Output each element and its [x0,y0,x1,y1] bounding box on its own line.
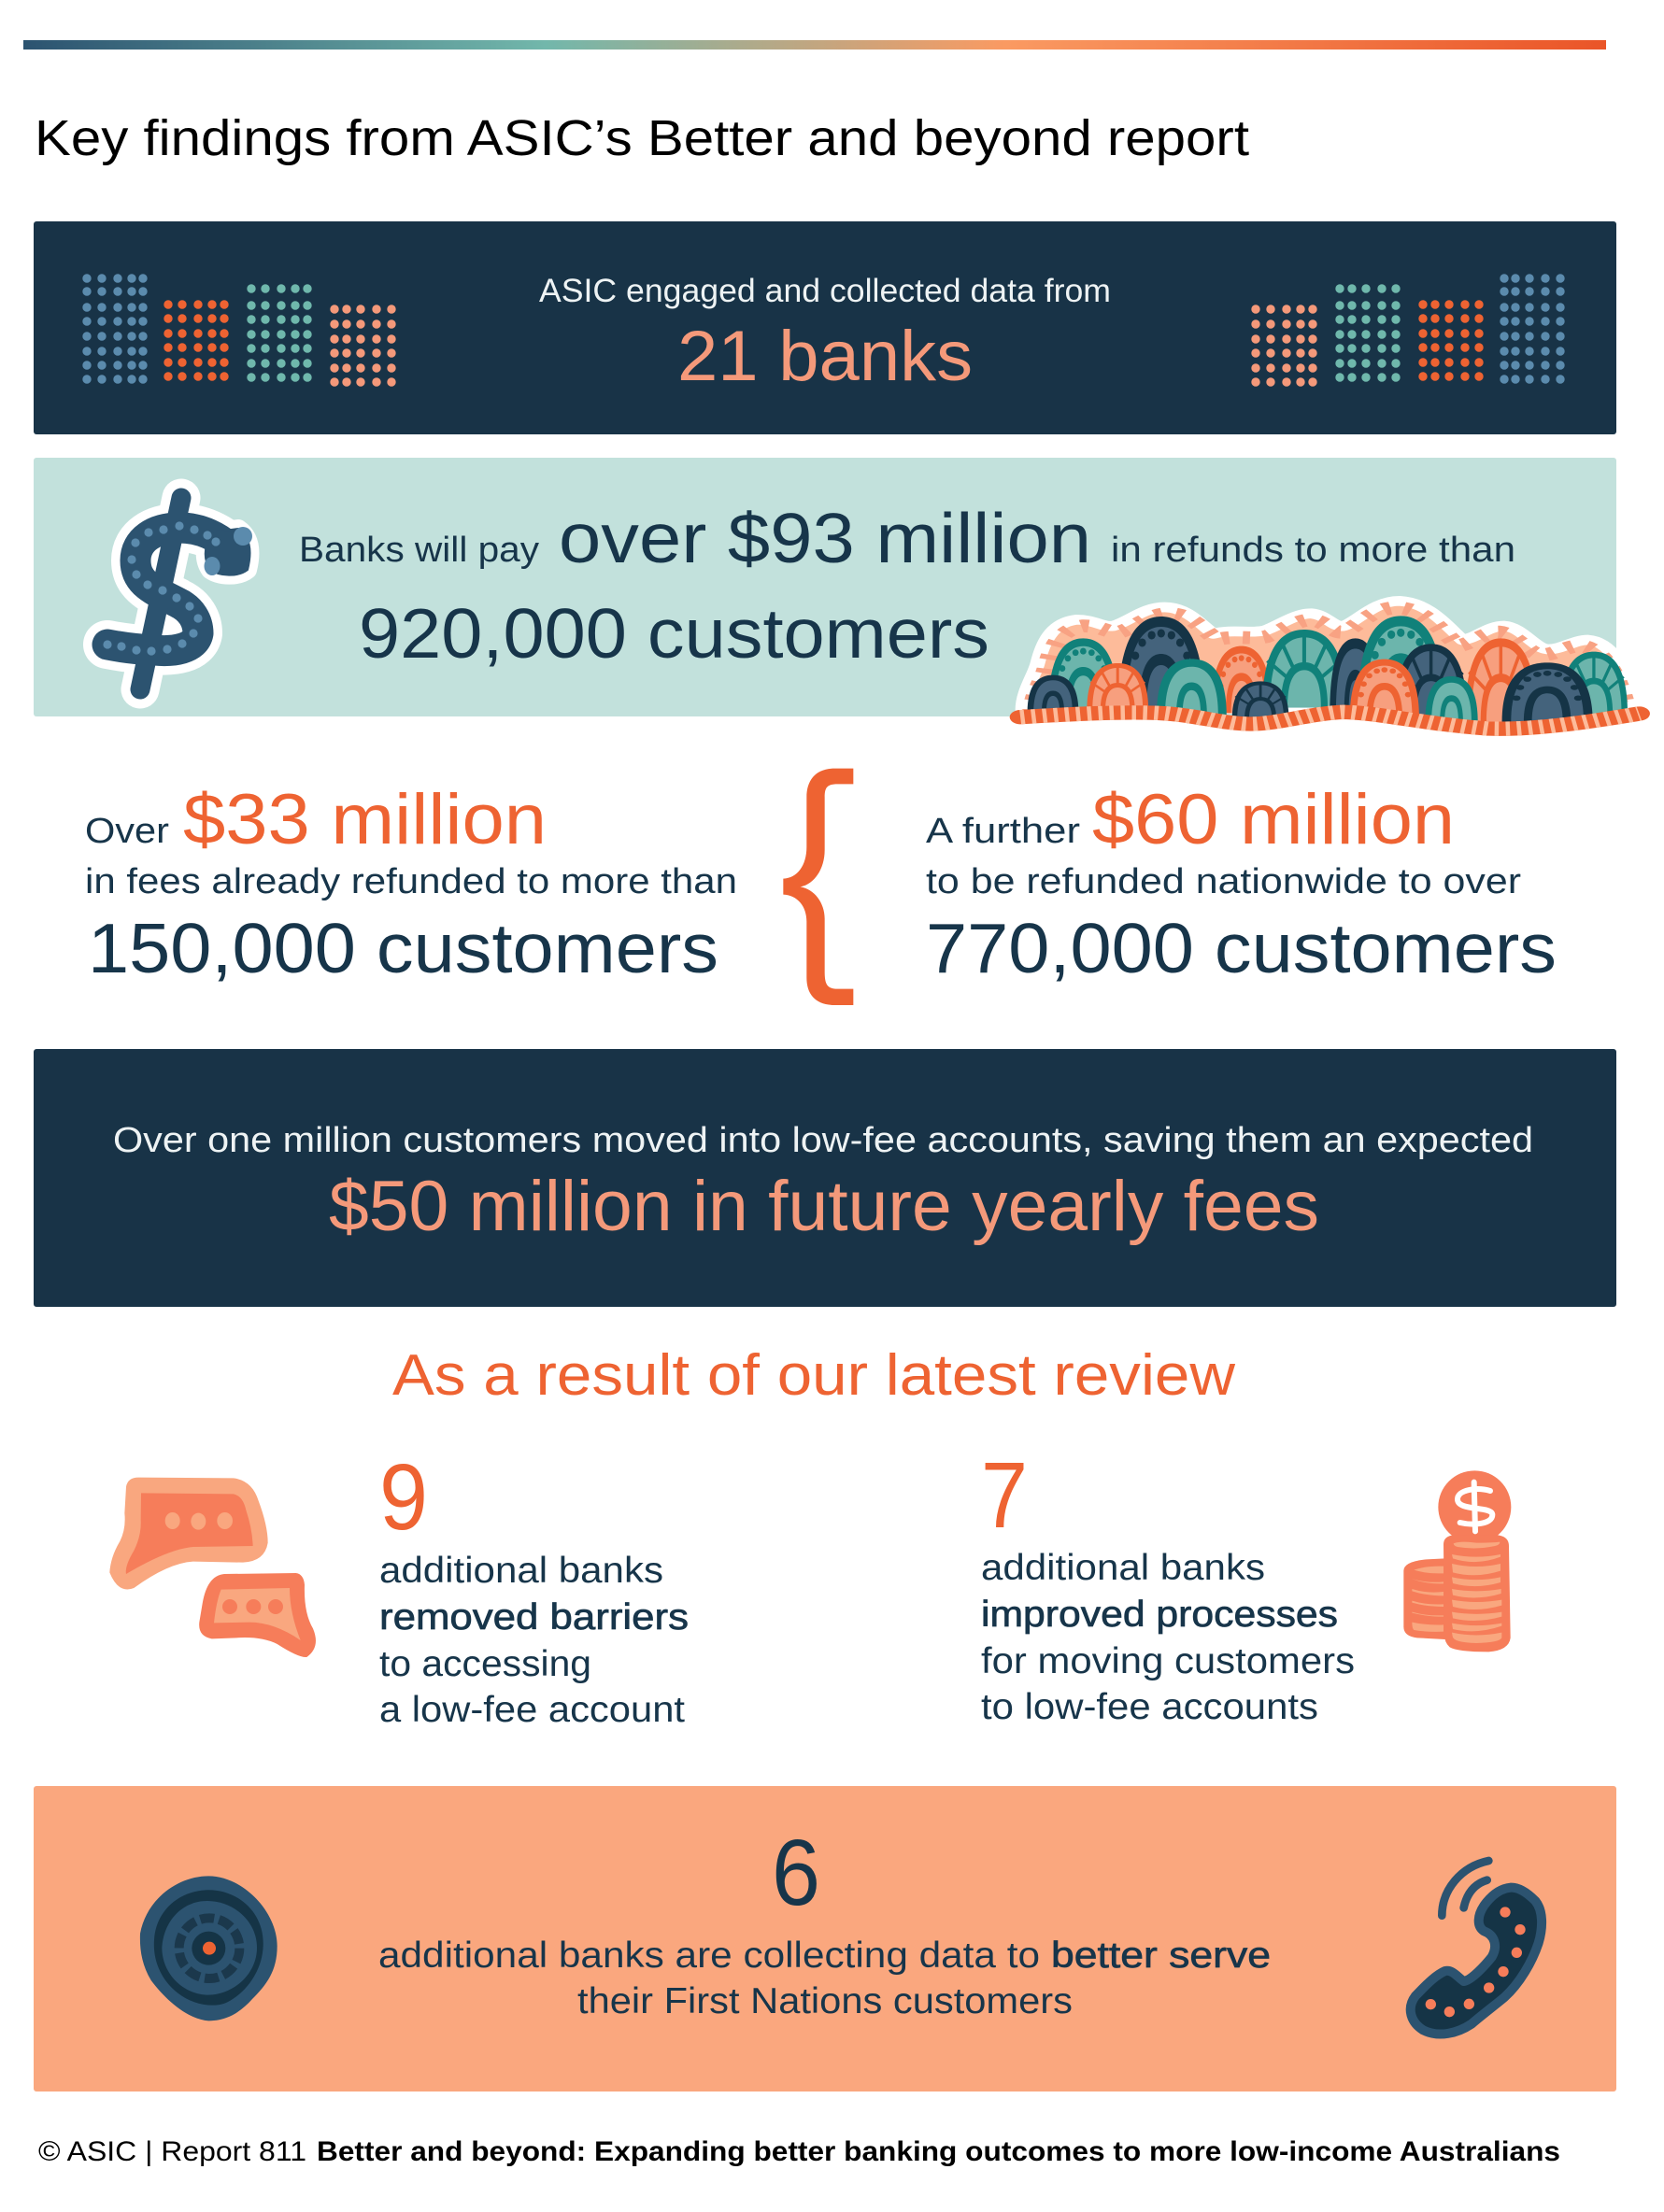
stat: $33 million: $33 million [183,780,547,859]
split: $60 million [926,780,1557,987]
icon: coin stacks [1403,1470,1511,1652]
stat: 920,000 customers: 920,000 customers [359,594,989,673]
stat: $50 million: $50 million in future yearly fees [329,1167,1319,1246]
text: collecting data [378,1936,1271,2021]
text: collecting data: their First Nations customers [577,1981,1073,2021]
stat: over $93 million: over $93 million [559,499,1091,577]
number: 6: 6 [772,1821,820,1925]
stat: 770,000 customers: 770,000 customers [926,909,1557,987]
text: improved processes [981,1548,1355,1727]
panel: First Nations [34,1786,1616,2091]
number: 7: 7 [981,1443,1028,1548]
text: in fees: in fees already refunded to more than [85,862,737,901]
heading: as a result: As a result of our latest review [392,1343,1235,1408]
icon: left dotted buildings [87,278,391,382]
block: 7 banks [981,1443,1511,1727]
text: a further: A further [926,812,1080,851]
panel: 21 banks [34,221,1616,434]
icon: dollar sign [103,498,252,689]
text: banks will pay: Banks will pay [299,531,539,570]
stat: 150,000 customers: 150,000 customers [88,909,718,987]
block: 9 banks [109,1445,689,1730]
icon: speech bubbles [109,1478,316,1657]
text: removed barriers [379,1551,689,1730]
icon: right dotted buildings [1256,278,1560,382]
text: improved processes: improved processes [981,1595,1338,1635]
text: engaged: ASIC engaged and collected data from [539,273,1111,309]
text: improved processes: additional banks [981,1548,1265,1588]
brace [783,769,853,1005]
panel: refunds [34,458,1639,729]
text: removed barriers: removed barriers [379,1597,689,1638]
text: improved processes: to low-fee accounts [981,1687,1318,1727]
text: collecting data: additional banks are collecting data to [378,1936,1040,1976]
stat: $60 million: $60 million [1092,780,1455,859]
panel: low-fee accounts [34,1049,1616,1307]
title: Key findings from ASIC’s Better and beyond report [35,110,1249,166]
text: over: Over [85,812,169,851]
icon: medallion [140,1876,277,2021]
number: 9: 9 [379,1445,428,1550]
footer: © ASIC | Report 811 [38,2136,306,2167]
text: to be refunded: to be refunded nationwide to over [926,862,1521,901]
top gradient bar [23,40,1606,50]
stat: 21 banks: 21 banks [677,317,973,396]
text: collecting data: better serve [1051,1936,1271,1976]
text: in refunds: in refunds to more than [1111,531,1515,570]
text: removed barriers: to accessing [379,1644,591,1684]
text: removed barriers: additional banks [379,1551,663,1591]
text: improved processes: for moving customers [981,1641,1355,1681]
icon: telephone [1411,1861,1542,2035]
illustration: hills [1020,601,1639,729]
text: over one million: Over one million customers moved into low-fee accounts, saving them an expected [113,1121,1533,1160]
text: removed barriers: a low-fee account [379,1690,685,1730]
footer: Better and beyond: Expanding better banking outcomes to more low-income Australians [317,2136,1560,2167]
split: $33 million [85,780,737,987]
